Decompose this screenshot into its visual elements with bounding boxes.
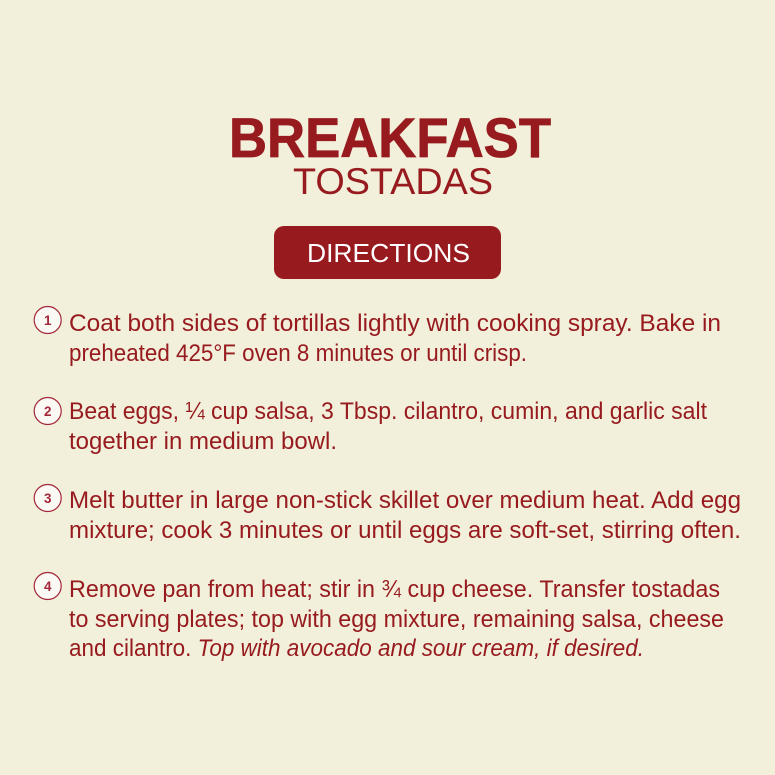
step 1: preheated 425°F oven 8 minutes or until crisp. bbox=[69, 340, 527, 367]
step 2 bbox=[34, 398, 707, 455]
icon: number 4 bbox=[34, 572, 61, 600]
icon: number 4: 4 bbox=[44, 579, 52, 594]
step 1 bbox=[34, 306, 721, 367]
icon: number 3: 3 bbox=[44, 491, 52, 506]
step 4: Remove pan from heat; stir in ¾ cup cheese. Transfer tostadas bbox=[69, 576, 720, 603]
step 1: Coat both sides of tortillas lightly with cooking spray. Bake in bbox=[69, 310, 721, 337]
title: TOSTADAS bbox=[293, 160, 493, 202]
title bbox=[229, 106, 551, 202]
step 4: to serving plates; top with egg mixture, remaining salsa, cheese bbox=[69, 606, 724, 633]
step 3: Melt butter in large non-stick skillet over medium heat. Add egg bbox=[69, 487, 741, 514]
icon: number 2: 2 bbox=[44, 404, 51, 419]
step 2: together in medium bowl. bbox=[69, 428, 337, 455]
icon: number 3 bbox=[34, 484, 61, 512]
step 3 bbox=[34, 484, 741, 544]
step 4: and cilantro. Top with avocado and sour cream, if desired. bbox=[69, 635, 644, 662]
title: BREAKFAST bbox=[229, 106, 551, 169]
icon: number 1: 1 bbox=[44, 313, 52, 328]
step 4 bbox=[34, 572, 724, 662]
icon: number 1 bbox=[34, 306, 61, 334]
icon: number 2 bbox=[34, 398, 61, 424]
step 3: mixture; cook 3 minutes or until eggs are soft-set, stirring often. bbox=[69, 517, 741, 544]
directions badge: DIRECTIONS bbox=[307, 238, 470, 268]
directions badge bbox=[274, 226, 501, 279]
step 2: Beat eggs, ¼ cup salsa, 3 Tbsp. cilantro, cumin, and garlic salt bbox=[69, 398, 707, 425]
